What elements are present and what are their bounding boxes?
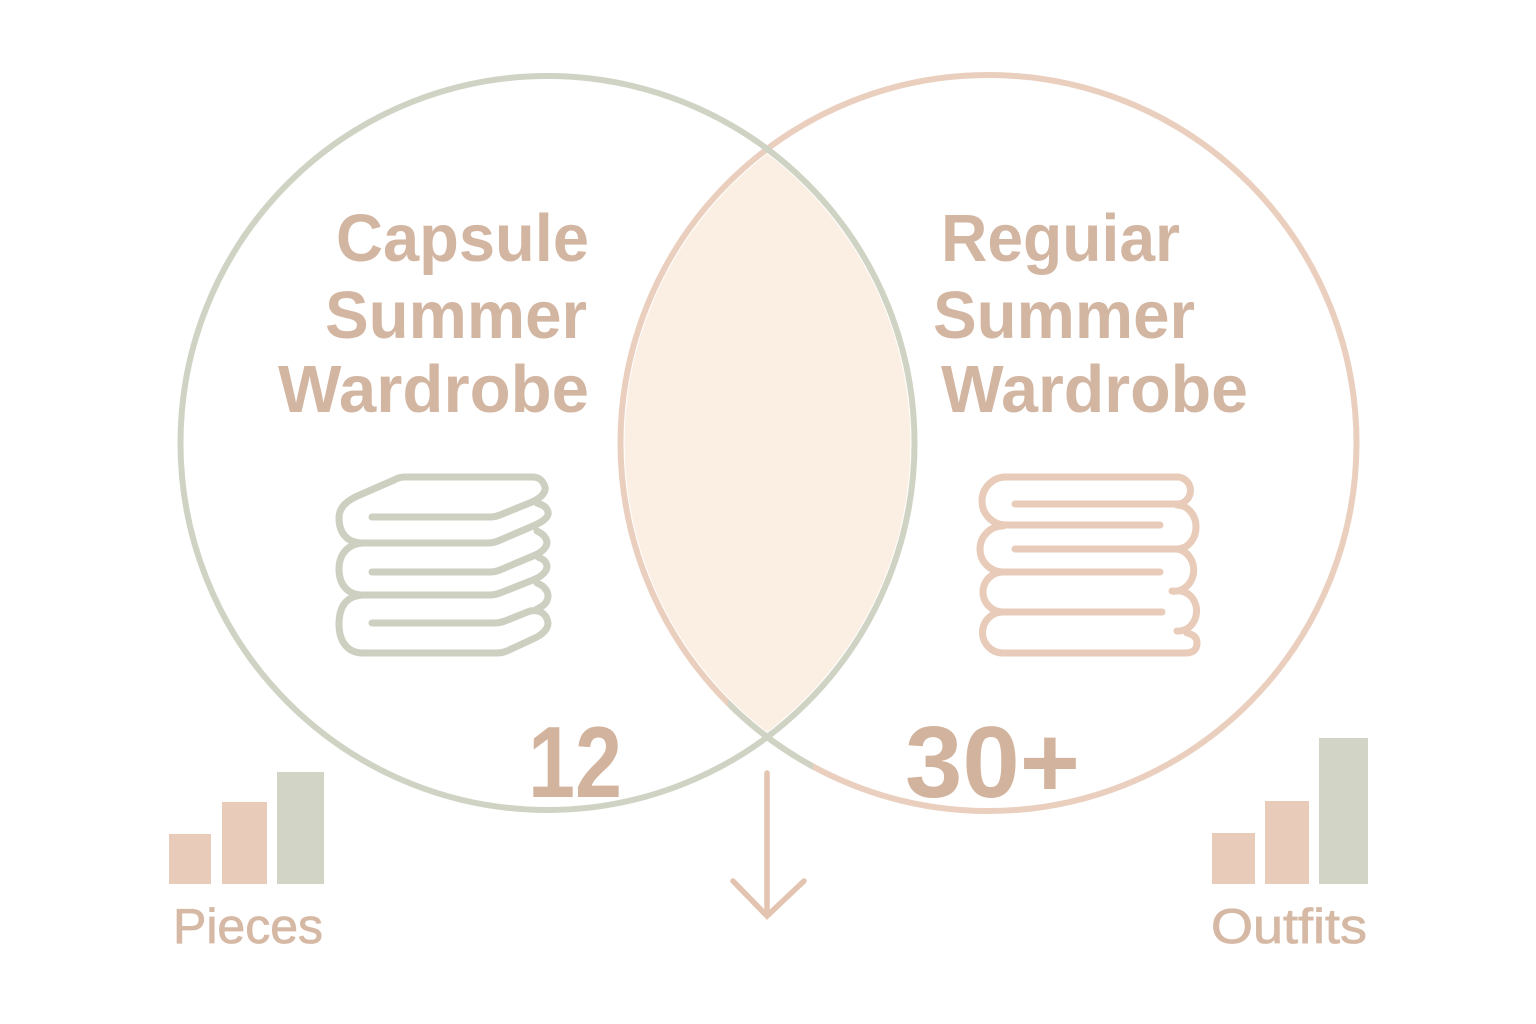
overlap lens	[624, 154, 910, 732]
bar chart: pieces	[169, 772, 324, 884]
heading: capsule summer wardrobe	[278, 201, 589, 427]
arrow: down	[733, 773, 804, 916]
right circle: regular wardrobe	[620, 75, 1356, 811]
stat: 30+: 30+	[905, 707, 1080, 819]
heading: regular summer wardrobe: Summer	[933, 278, 1195, 353]
label: pieces: Pieces	[173, 900, 323, 954]
stat: 12: 12	[528, 707, 622, 819]
icon: angled folded clothes stack	[339, 477, 548, 653]
venn diagram infographic	[169, 72, 1368, 944]
bar chart: outfits	[1212, 738, 1368, 884]
heading: regular summer wardrobe: Reguiar	[941, 201, 1180, 276]
heading: capsule summer wardrobe: Capsule	[336, 201, 589, 276]
heading: regular summer wardrobe	[933, 201, 1248, 427]
label: outfits: Outfits	[1211, 900, 1367, 954]
heading: regular summer wardrobe: Wardrobe	[941, 352, 1248, 427]
icon: flat folded clothes stack	[980, 477, 1197, 653]
left circle: capsule wardrobe	[180, 76, 914, 810]
crossing accent: sage section of right circle	[728, 700, 813, 770]
heading: capsule summer wardrobe: Wardrobe	[278, 352, 589, 427]
heading: capsule summer wardrobe: Summer	[325, 278, 587, 353]
